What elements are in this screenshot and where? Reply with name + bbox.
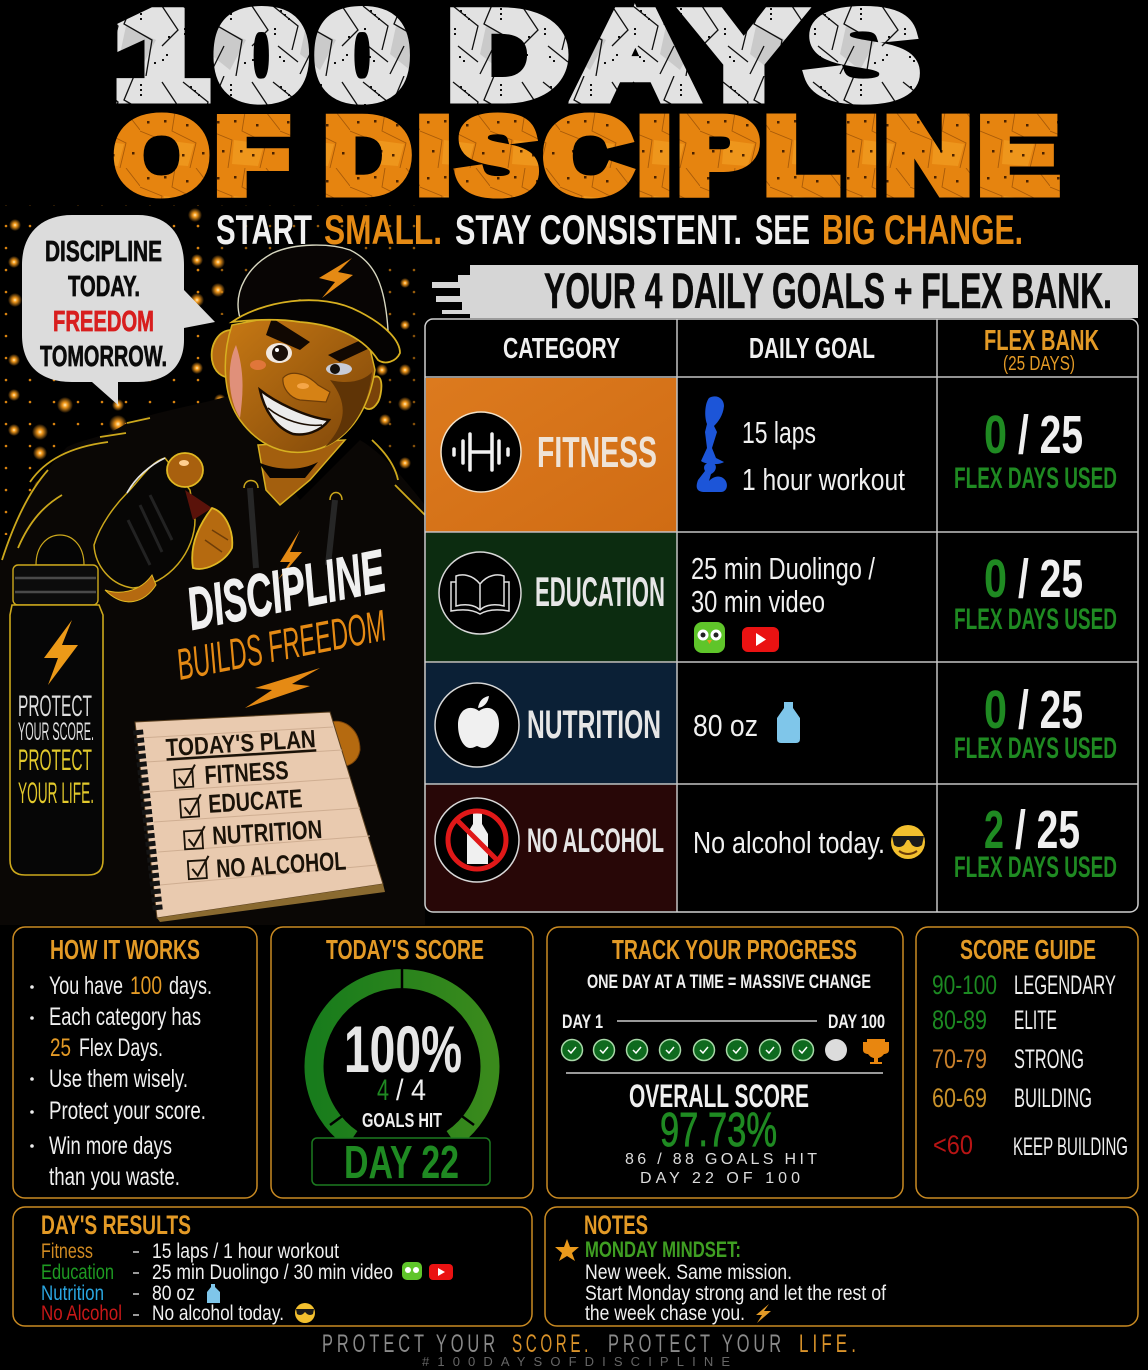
score value [344, 1012, 462, 1132]
bullet list [30, 972, 212, 1191]
footer slogan: SCORE. [512, 1330, 592, 1358]
icon: cap lightning [319, 258, 353, 298]
tagline: START [216, 206, 312, 253]
bullet list: Flex Days. [79, 1034, 163, 1062]
score value: / 4 [396, 1074, 426, 1107]
flex count nutrition: / 25 [1018, 680, 1083, 740]
icon: star [555, 1239, 579, 1261]
panel: how it works [13, 927, 257, 1198]
row: nutrition [435, 680, 1117, 767]
speech bubble: TODAY. [68, 271, 140, 303]
character illustration [0, 245, 425, 925]
row: fitness: FITNESS [537, 428, 657, 477]
panel: day's results: Nutrition [41, 1282, 104, 1305]
icon: water bottle [777, 702, 800, 743]
wrist highlight [105, 575, 156, 602]
panel: track your progress: DAY 1 [562, 1012, 603, 1033]
panel: today's score: TODAY'S SCORE [326, 934, 484, 965]
pointing fist [94, 453, 232, 588]
table header: (25 DAYS) [1003, 353, 1075, 375]
sleeve trim [185, 490, 212, 520]
row: education: 25 min Duolingo / [691, 551, 875, 586]
spiral binding [138, 730, 158, 912]
plan text: TODAY'S PLAN [165, 725, 316, 762]
row: nutrition: 80 oz [693, 708, 758, 743]
flex count no alcohol [954, 800, 1117, 884]
icon: youtube [742, 627, 779, 652]
speech bubble: TOMORROW. [40, 341, 167, 373]
row fills [426, 378, 677, 532]
panel: day's results: Education [41, 1261, 114, 1284]
eyebrows [266, 318, 372, 362]
tagline: SMALL. [324, 206, 442, 253]
water bottle: YOUR LIFE. [18, 777, 94, 810]
panel: day's results: DAY'S RESULTS [41, 1210, 191, 1240]
bullet list: Protect your score. [49, 1097, 206, 1125]
thumb knuckles [192, 508, 232, 569]
background sparkle dots [0, 205, 435, 535]
icon: open book [439, 552, 521, 634]
icon: youtube small [429, 1264, 453, 1280]
panel: track your progress: OVERALL SCORE [629, 1078, 809, 1114]
row: nutrition: NUTRITION [527, 703, 661, 747]
panel: score guide: BUILDING [1014, 1083, 1092, 1113]
icon: small lightning [756, 1304, 771, 1323]
panel: track your progress [547, 927, 903, 1198]
flex count fitness: 0 [984, 405, 1007, 465]
panel: track your progress: DAY 100 [828, 1012, 885, 1033]
panel: track your progress: 86 / 88 GOALS HIT [625, 1151, 817, 1168]
table header: FLEX BANK [984, 325, 1099, 357]
panel: notes: MONDAY MINDSET: [585, 1237, 741, 1262]
panel: how it works: HOW IT WORKS [50, 934, 200, 965]
tagline: SEE [755, 206, 810, 253]
score value: 100% [344, 1012, 462, 1086]
infographic canvas: YOUR SCORE. [18, 718, 94, 746]
tagline: STAY CONSISTENT. [455, 206, 742, 253]
shirt print: DISCIPLINE BUILDS FREEDOM: BUILDS FREEDOM [173, 601, 390, 690]
icon: water bottle small [207, 1284, 220, 1303]
table header [503, 325, 1099, 375]
icon: blue leg [701, 396, 724, 464]
bottle text [18, 690, 94, 810]
row: no alcohol: NO ALCOHOL [527, 822, 664, 860]
hood drawstrings [250, 488, 335, 568]
eyes [266, 343, 292, 363]
panel: notes: the week chase you. [585, 1302, 745, 1325]
bullet list: Each category has [49, 1003, 201, 1031]
panel: track your progress: TRACK YOUR PROGRESS [612, 934, 857, 965]
panel: notes: NOTES [584, 1210, 648, 1240]
smile [260, 390, 329, 434]
flex count education [954, 549, 1117, 636]
icon: no alcohol [435, 798, 519, 882]
title line: OF DISCIPLINE: OF DISCIPLINE [115, 97, 1065, 215]
icon: dumbbell [441, 412, 521, 492]
plan text [165, 724, 347, 886]
icon: sunglasses emoji [891, 825, 925, 859]
panel: day's results: No Alcohol [41, 1302, 122, 1325]
score gauge [314, 979, 490, 1139]
score value: GOALS HIT [362, 1110, 442, 1132]
panel: day's results: 15 laps / 1 hour workout [152, 1240, 339, 1263]
row: no alcohol: No alcohol today. [693, 825, 885, 860]
speech bubble: FREEDOM [53, 306, 154, 338]
plan text: EDUCATE [207, 783, 303, 819]
panel: score guide: 70-79 [932, 1044, 987, 1074]
row: education: EDUCATION [535, 568, 665, 615]
panel: today's score [271, 927, 533, 1198]
table header: DAILY GOAL [749, 333, 875, 365]
panel: day's results: No alcohol today. [152, 1302, 284, 1325]
tagline: BIG CHANGE. [822, 206, 1023, 253]
hashtag: #100DAYSOFDISCIPLINE [422, 1354, 730, 1369]
bottle cap dome [36, 535, 84, 565]
footer slogan: PROTECT YOUR [608, 1330, 785, 1358]
icon: trophy [863, 1039, 889, 1064]
icon: sunglasses emoji small [295, 1303, 315, 1323]
bullet list: Use them wisely. [49, 1065, 188, 1093]
flex count no alcohol: 2 [984, 800, 1004, 860]
panel: score guide: <60 [933, 1130, 973, 1160]
panel: notes [545, 1207, 1138, 1326]
shirt print: DISCIPLINE BUILDS FREEDOM [173, 530, 392, 708]
bullet list: Win more days [49, 1132, 172, 1160]
icon: bottle lightning [44, 620, 78, 685]
panel: notes: New week. Same mission. [585, 1261, 792, 1284]
nose [283, 373, 330, 402]
panel: day's results: Fitness [41, 1240, 93, 1263]
flex count nutrition: 0 [984, 680, 1007, 740]
flex count education: / 25 [1018, 549, 1083, 609]
shirt print: DISCIPLINE BUILDS FREEDOM: DISCIPLINE [181, 537, 392, 643]
row: fitness: 15 laps [742, 415, 816, 450]
index finger [167, 453, 203, 487]
glove [94, 458, 195, 588]
footer slogan: PROTECT YOUR [322, 1330, 499, 1358]
panel: track your progress: 97.73% [660, 1104, 777, 1157]
day badge: DAY 22 [344, 1136, 459, 1188]
row: fitness [441, 396, 1117, 497]
plan text: NUTRITION [211, 814, 323, 851]
icon: apple [435, 683, 519, 767]
flex count fitness [954, 405, 1117, 495]
flex count fitness: / 25 [1018, 405, 1083, 465]
bullet list: You have [49, 972, 123, 1000]
icon: duolingo owl small [402, 1262, 422, 1280]
water bottle [10, 535, 103, 875]
speech bubble: DISCIPLINE [45, 236, 162, 268]
icon: duolingo owl [694, 622, 725, 653]
bullet list: 100 [130, 972, 162, 1000]
panel: score guide: 60-69 [932, 1083, 987, 1113]
plan text: FITNESS [204, 755, 289, 790]
hoodie body [0, 395, 425, 925]
flex count education: 0 [984, 549, 1007, 609]
bullet list: days. [169, 972, 212, 1000]
panel: score guide: 80-89 [932, 1005, 987, 1035]
tagline [216, 206, 1023, 253]
panel: day's results [13, 1207, 532, 1326]
panel: score guide: STRONG [1014, 1044, 1084, 1074]
icon: blue flexed arm [697, 463, 727, 492]
panel: score guide: 90-100 [932, 970, 997, 1000]
notepad: today's plan [135, 712, 385, 922]
flex count no alcohol: / 25 [1015, 800, 1080, 860]
cap [232, 245, 400, 362]
row: fitness: 1 hour workout [742, 462, 905, 497]
footer slogan: LIFE. [799, 1330, 860, 1358]
panel: day's results: 25 min Duolingo / 30 min video [152, 1261, 393, 1284]
row: no alcohol [435, 798, 1117, 884]
row: education [439, 549, 1117, 653]
title [115, 0, 1065, 215]
footer slogan [322, 1330, 860, 1369]
bottle text: PROTECT [18, 744, 92, 777]
speech bubble [22, 215, 215, 405]
bullet list: 25 [50, 1034, 71, 1062]
panel: day's results: 80 oz [152, 1282, 195, 1305]
bullet list: than you waste. [49, 1163, 180, 1191]
panel: score guide: ELITE [1014, 1005, 1057, 1035]
panel: track your progress: DAY 22 OF 100 [640, 1170, 800, 1187]
hand behind notepad [330, 721, 360, 766]
goals table [425, 319, 1138, 912]
panel: track your progress: ONE DAY AT A TIME = MASSIVE CHANGE [587, 972, 871, 993]
score value: 4 [377, 1074, 389, 1107]
progress checkmarks [562, 1039, 847, 1061]
face [212, 312, 381, 452]
panel: notes: Start Monday strong and let the rest of [585, 1282, 886, 1305]
table header: CATEGORY [503, 333, 620, 365]
panel: score guide [916, 927, 1138, 1198]
plan text: NO ALCOHOL [215, 846, 347, 883]
row: education: 30 min video [691, 584, 825, 619]
bottle text: PROTECT [18, 690, 92, 723]
gauge segment gaps [330, 968, 474, 1125]
neck [258, 440, 345, 505]
flex count nutrition [954, 680, 1117, 765]
